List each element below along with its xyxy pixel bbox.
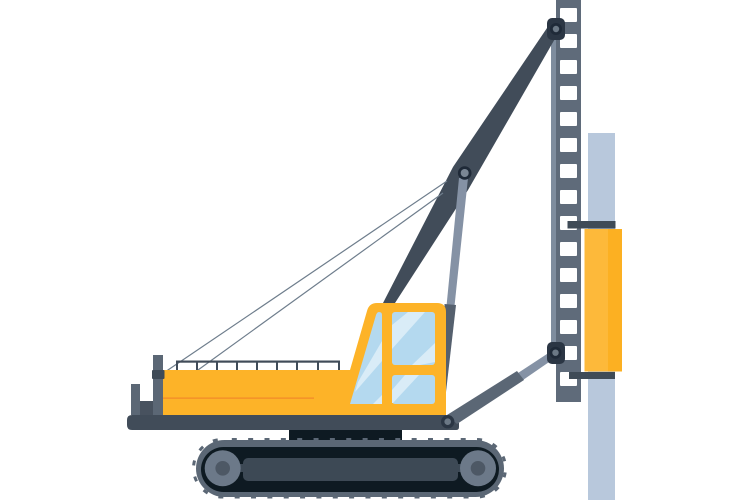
lower hydraulic arm — [447, 352, 552, 424]
upper window — [392, 312, 435, 365]
rear posts and counterweight — [131, 355, 164, 415]
pile hammer with clamps — [568, 221, 622, 379]
lower window — [392, 375, 435, 404]
track teeth — [194, 440, 506, 497]
top mast pivot — [547, 18, 565, 40]
boom joint pivot — [458, 166, 472, 180]
center bar — [236, 458, 465, 481]
front window — [350, 312, 382, 404]
track inner — [201, 447, 499, 492]
right wheel — [460, 450, 496, 486]
deck railing — [176, 360, 340, 370]
mast with window slots — [551, 0, 581, 402]
orange body stripe — [163, 398, 314, 399]
dark support strut — [444, 304, 456, 392]
cab windows — [350, 312, 435, 404]
crawler track — [194, 440, 506, 497]
concrete pile — [588, 133, 615, 500]
light support strut — [446, 178, 468, 306]
left wheel — [205, 450, 241, 486]
chassis pivot — [441, 415, 454, 428]
chassis deck — [127, 415, 459, 430]
undercarriage block — [289, 430, 402, 442]
lower mast pivot — [547, 342, 565, 364]
track belt — [196, 440, 504, 497]
suspension cables — [165, 181, 447, 372]
yellow body and cab — [163, 303, 446, 415]
boom arm — [383, 28, 556, 303]
